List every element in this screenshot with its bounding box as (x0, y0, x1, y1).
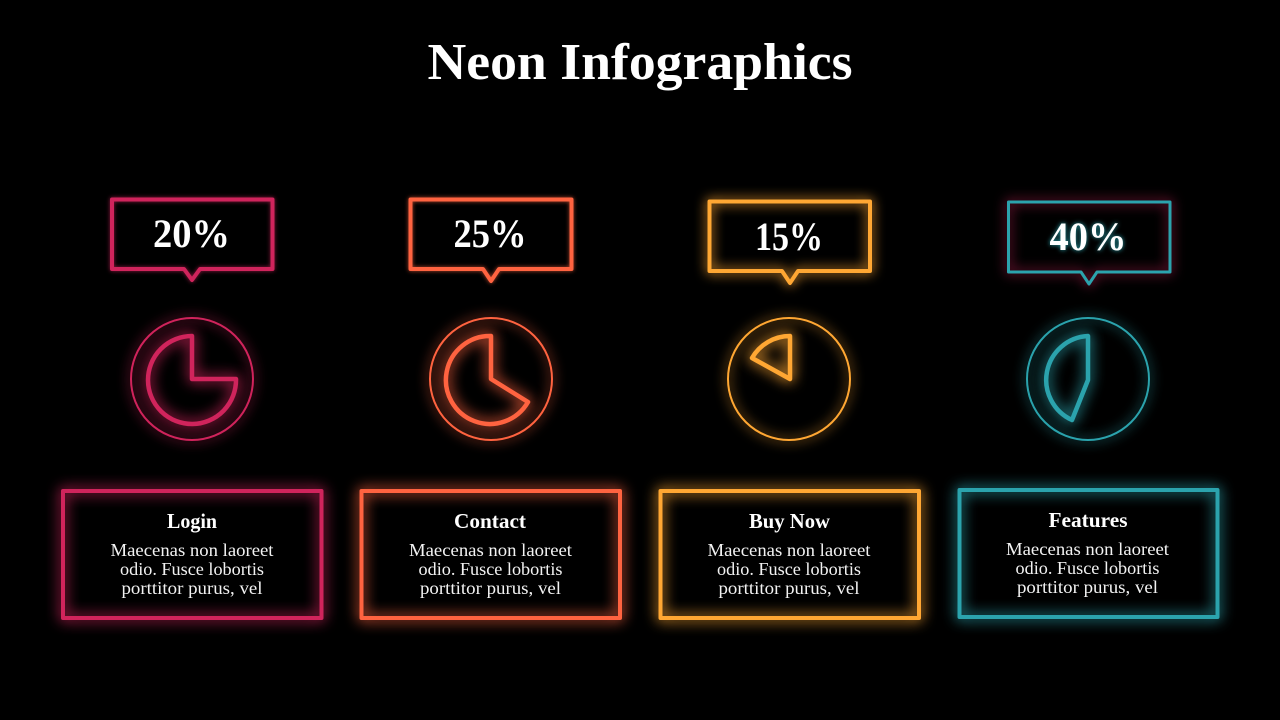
callout outline (710, 202, 870, 283)
callout: 15% (710, 202, 870, 283)
icon ring (430, 318, 552, 440)
callout value: 25% (454, 211, 526, 256)
box heading: Features (1048, 508, 1128, 532)
callout value: 15% (755, 214, 823, 259)
callout: 25% (410, 200, 572, 281)
box body: odio. Fusce lobortis (120, 559, 264, 579)
text box: buy now (660, 491, 919, 618)
icon: pie chart 20% (131, 318, 253, 440)
icon ring (1027, 318, 1149, 440)
box body: Maecenas non laoreet (708, 540, 871, 560)
box body: odio. Fusce lobortis (418, 559, 563, 579)
box body: Maecenas non laoreet (110, 540, 274, 560)
callout outline (112, 200, 272, 280)
pie slice (1046, 336, 1088, 420)
box body: porttitor purus, vel (718, 578, 860, 598)
callout value: 20% (153, 211, 230, 256)
callout outline (410, 200, 572, 281)
panel: buy now 15% (660, 202, 919, 618)
icon ring (131, 318, 253, 440)
text box: features (960, 490, 1218, 617)
panel: login 20% (63, 200, 322, 618)
box outline (660, 491, 919, 618)
box body: Maecenas non laoreet (409, 540, 572, 560)
icon ring (728, 318, 850, 440)
icon: pie chart 15% (728, 318, 850, 440)
text box: contact (362, 491, 620, 618)
pie slice (148, 336, 236, 424)
callout outline (1008, 202, 1170, 284)
panel: contact 25% (362, 200, 620, 618)
box outline (63, 491, 322, 618)
callout: 20% (112, 200, 272, 280)
box body: Maecenas non laoreet (1006, 539, 1169, 559)
icon: pie chart 40% (1027, 318, 1149, 440)
box outline (362, 491, 620, 618)
box body: odio. Fusce lobortis (1016, 558, 1160, 578)
box heading: Buy Now (749, 509, 831, 533)
callout: 40% (1008, 202, 1170, 284)
title: Neon Infographics (428, 34, 852, 91)
pie slice (446, 336, 528, 424)
box body: porttitor purus, vel (122, 578, 263, 598)
box body: odio. Fusce lobortis (717, 559, 861, 579)
pie slice (752, 336, 790, 379)
text box: login (63, 491, 322, 618)
panel: features 40% (960, 202, 1218, 617)
callout value: 40% (1050, 214, 1126, 259)
box heading: Login (167, 509, 217, 533)
icon: pie chart 25% (430, 318, 552, 440)
box body: porttitor purus, vel (1017, 577, 1158, 597)
box body: porttitor purus, vel (420, 578, 561, 598)
box outline (960, 490, 1218, 617)
box heading: Contact (454, 509, 526, 533)
